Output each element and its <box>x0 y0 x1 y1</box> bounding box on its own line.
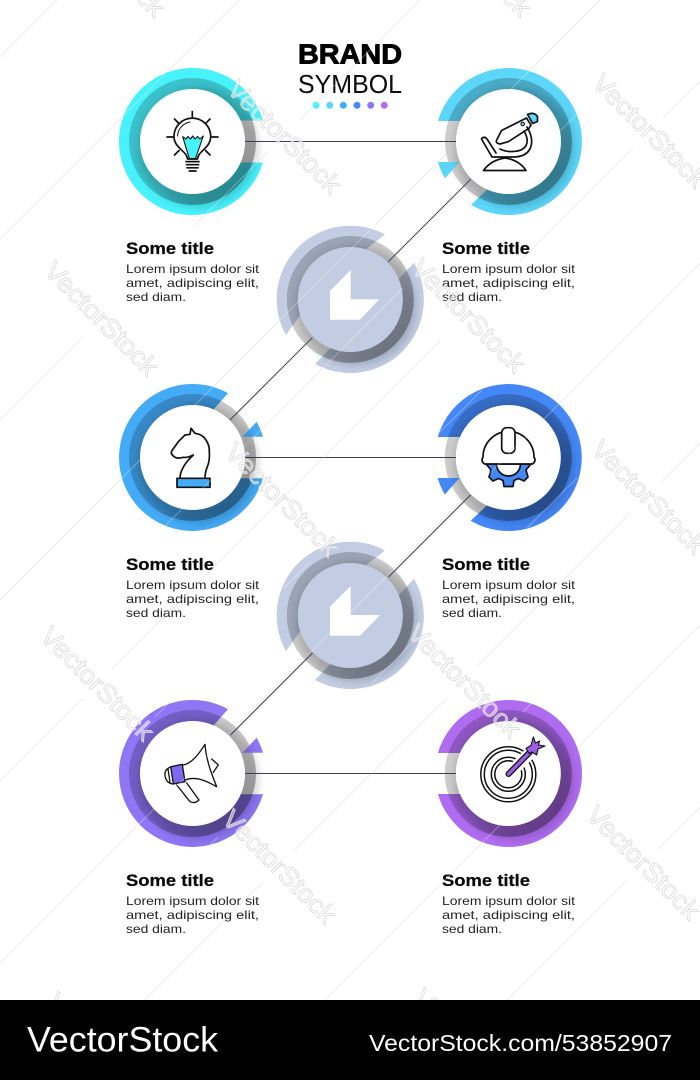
footer bar <box>0 1000 700 1080</box>
text block: step 1 <box>126 239 260 304</box>
title: SYMBOL <box>298 71 402 99</box>
text block: step 6: amet, adipiscing elit, <box>442 908 575 922</box>
text block: step 5: amet, adipiscing elit, <box>126 908 259 922</box>
watermark text: VectorStock <box>221 74 348 200</box>
text block: step 6: sed diam. <box>442 922 502 936</box>
text block: step 3: Some title <box>126 555 214 574</box>
icon: microscope <box>482 113 538 170</box>
centre circle 2: arrow <box>277 542 424 689</box>
footer bar: VectorStock <box>27 1020 219 1060</box>
text block: step 4: Lorem ipsum dolor sit <box>442 578 576 592</box>
connector lines <box>230 142 471 774</box>
icon: target with dart <box>481 737 545 802</box>
text block: step 5: sed diam. <box>126 922 186 936</box>
watermark text: VectorStock <box>34 621 161 747</box>
text block: step 1: Some title <box>126 239 214 258</box>
icon: white arrow <box>330 270 379 320</box>
step 2 circle: microscope <box>438 68 582 215</box>
text block: step 5: Lorem ipsum dolor sit <box>126 894 260 908</box>
icon: helmet and gear <box>482 428 535 486</box>
text block: step 2: Some title <box>442 239 530 258</box>
watermark text: VectorStock <box>580 800 700 926</box>
text block: step 2 <box>442 239 576 304</box>
watermark text: VectorStock <box>405 253 532 379</box>
text block: step 6: Some title <box>442 871 530 890</box>
text block: step 4: amet, adipiscing elit, <box>442 592 575 606</box>
icon: light bulb <box>167 112 218 171</box>
step 3 circle: chess knight <box>119 384 263 531</box>
watermark text: VectorStock <box>401 618 528 744</box>
text block: step 4: sed diam. <box>442 606 502 620</box>
text block: step 5: Some title <box>126 871 214 890</box>
watermark text: VectorStock <box>38 256 165 382</box>
icon: megaphone <box>165 744 218 803</box>
text block: step 3: sed diam. <box>126 606 186 620</box>
text block: step 2: sed diam. <box>442 290 502 304</box>
centre circle 1: arrow <box>277 226 424 373</box>
icon: chess knight <box>171 428 210 487</box>
title <box>298 38 402 99</box>
text block: step 4 <box>442 555 576 620</box>
icon: white arrow <box>330 586 380 636</box>
step 1 circle: light bulb <box>119 68 263 215</box>
text block: step 3: amet, adipiscing elit, <box>126 592 259 606</box>
watermark text: VectorStock <box>219 437 346 563</box>
title: BRAND <box>298 38 402 70</box>
text block: step 6: Lorem ipsum dolor sit <box>442 894 576 908</box>
text block: step 1: Lorem ipsum dolor sit <box>126 262 260 276</box>
text block: step 4: Some title <box>442 555 530 574</box>
text block: step 3: Lorem ipsum dolor sit <box>126 578 260 592</box>
step 4 circle: helmet and gear <box>438 384 582 531</box>
title colour dots <box>312 102 388 109</box>
text block: step 2: amet, adipiscing elit, <box>442 276 575 290</box>
text block: step 3 <box>126 555 260 620</box>
text block: step 1: amet, adipiscing elit, <box>126 276 259 290</box>
text block: step 5 <box>126 871 260 936</box>
text block: step 6 <box>442 871 576 936</box>
footer bar: VectorStock.com/53852907 <box>369 1030 672 1056</box>
text block: step 2: Lorem ipsum dolor sit <box>442 262 576 276</box>
step 6 circle: target <box>438 700 582 847</box>
text block: step 1: sed diam. <box>126 290 186 304</box>
step 5 circle: megaphone <box>119 700 263 847</box>
watermark text: VectorStock <box>216 804 343 930</box>
